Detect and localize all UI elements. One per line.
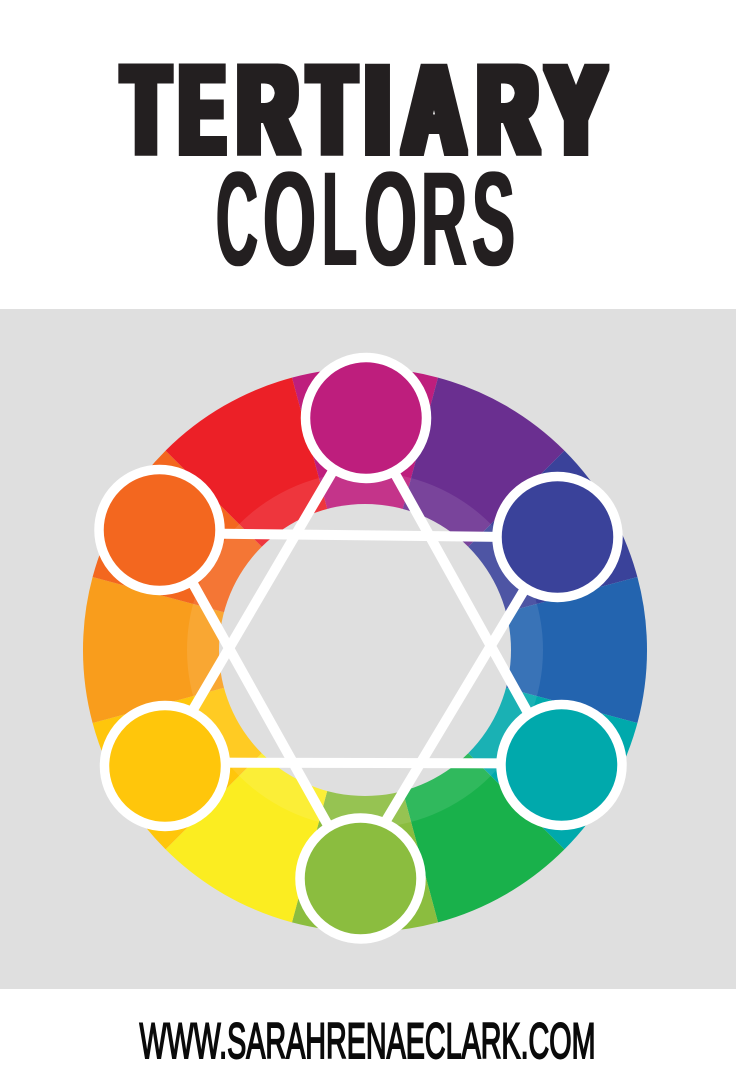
wedge: red-orange <box>93 451 365 650</box>
title: TERTIARY: A <box>404 41 464 180</box>
title: TERTIARY: Y <box>547 41 605 180</box>
subtitle: COLORS: O <box>263 145 316 294</box>
colour wheel <box>83 368 647 932</box>
wedge: green <box>365 650 564 922</box>
wedge: purple <box>365 378 564 650</box>
title: TERTIARY: E <box>180 41 224 180</box>
title: TERTIARY: R <box>238 41 298 180</box>
swatch: magenta <box>306 358 426 478</box>
triangle connectors: orange, blue-violet, yellow-green <box>160 530 557 879</box>
wedge: blue <box>365 577 647 723</box>
swatch: yellow-green <box>300 818 421 939</box>
wedge: amber <box>83 577 365 723</box>
swatch: red-orange <box>99 470 220 590</box>
wedge: blue-violet <box>365 451 637 650</box>
title: TERTIARY: I <box>365 41 390 180</box>
swatch: golden yellow <box>104 706 226 826</box>
wedge: golden yellow <box>93 650 365 849</box>
wedge: red <box>166 378 365 650</box>
subtitle: COLORS: L <box>322 145 357 294</box>
wedge: teal <box>365 650 637 849</box>
title: TERTIARY: T <box>124 41 168 180</box>
title: TERTIARY: T <box>310 41 354 180</box>
subtitle: COLORS: C <box>216 145 258 294</box>
wedge: yellow-green <box>292 650 438 932</box>
wedge: yellow <box>166 650 365 922</box>
title: TERTIARY: R <box>478 41 538 180</box>
wedge: magenta <box>292 368 438 650</box>
centre hole <box>219 504 511 796</box>
subtitle: COLORS: O <box>364 145 417 294</box>
swatch: teal <box>501 704 622 826</box>
inner lighter band <box>187 472 543 828</box>
triangle connectors: magenta, gold, teal <box>160 418 561 766</box>
text: S <box>472 145 515 294</box>
swatch: blue-violet <box>497 476 618 598</box>
subtitle: COLORS: R <box>421 145 467 294</box>
panel: grey background <box>0 309 736 989</box>
